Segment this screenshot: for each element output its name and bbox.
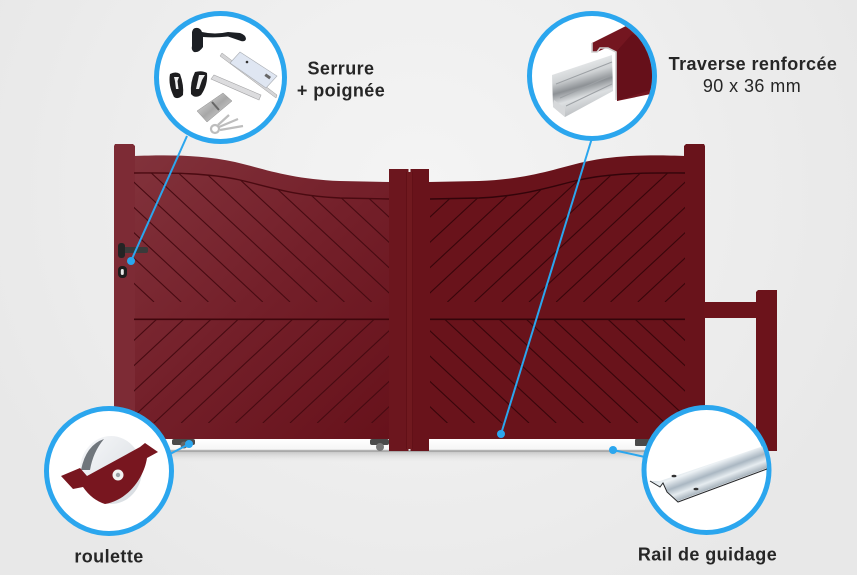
left post: [114, 144, 135, 451]
icon: door handle: [192, 28, 246, 52]
right post: [684, 144, 705, 451]
callout: traverse renforcée: [527, 11, 657, 141]
icon: wheel: [80, 436, 142, 504]
label: serrure + poignée: Serrure: [308, 58, 374, 78]
left gate leaf: [114, 144, 389, 439]
icon: right escutcheon: [191, 71, 207, 97]
icon: left escutcheon: [170, 72, 183, 98]
centre posts: [389, 169, 429, 451]
leader line: rail: [609, 446, 645, 457]
icon: strike plate: [211, 75, 261, 100]
side post and crossbar: [704, 290, 777, 451]
icon: lock cylinder: [197, 93, 232, 122]
right gate leaf: [429, 144, 705, 439]
label: traverse renforcée: 90 x 36 mm: [703, 76, 801, 96]
key escutcheon: [118, 266, 127, 278]
leader line: traverse: [497, 138, 592, 438]
right upper hatching: [430, 174, 685, 302]
icon: reinforced profile: [552, 26, 652, 117]
right lower hatching: [430, 320, 685, 423]
label: roulette: roulette: [74, 546, 144, 566]
icon: bracket: [61, 443, 158, 504]
callout: rail de guidage: [644, 408, 775, 532]
label: serrure + poignée: [297, 58, 385, 100]
label: rail de guidage: Rail de guidage: [638, 544, 777, 564]
label: traverse renforcée: Traverse renforcée: [669, 54, 837, 74]
left upper hatching: [134, 174, 389, 302]
callout: roulette: [46, 408, 172, 534]
icon: mortise lock: [220, 52, 277, 98]
icon: hub: [112, 470, 124, 480]
icon: keys: [211, 115, 243, 133]
label: traverse renforcée: [669, 54, 837, 96]
label: serrure + poignée: + poignée: [297, 80, 385, 100]
leader line: roulette: [170, 440, 193, 454]
icon: guide rail: [650, 446, 767, 503]
left lower hatching: [134, 320, 389, 423]
door handle: [118, 243, 148, 278]
rollers: [172, 439, 653, 451]
callout: serrure + poignée: [156, 14, 284, 142]
leader line: serrure: [127, 136, 187, 265]
ground rail strip: [130, 439, 650, 462]
